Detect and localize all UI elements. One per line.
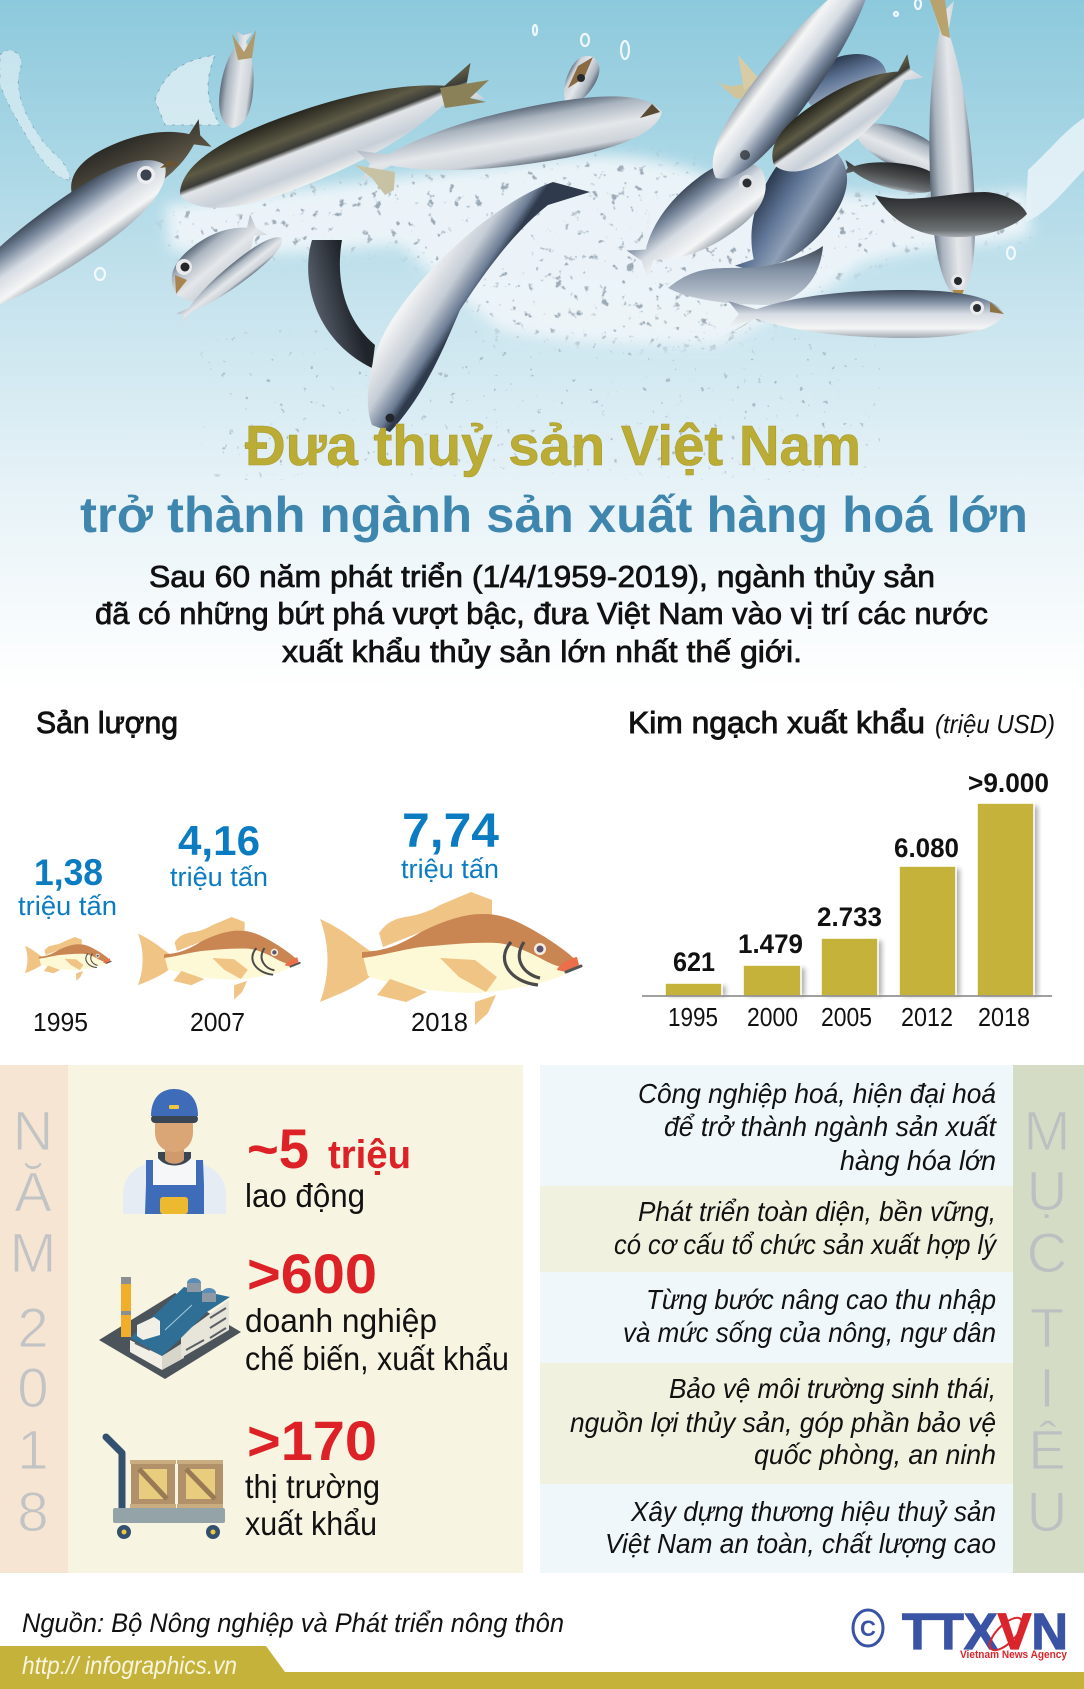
vertical label: MỤC TIÊU: M	[1024, 1099, 1070, 1162]
bar years: 2018	[978, 1002, 1030, 1032]
bar years: 2000	[747, 1002, 798, 1032]
droplets below the fish	[200, 330, 880, 480]
bar values: 621	[673, 947, 715, 977]
stat: workers	[245, 1117, 411, 1214]
value: 1,38	[34, 852, 103, 893]
bar shadows	[669, 806, 1038, 996]
vertical label: MỤC TIÊU: I	[1039, 1356, 1055, 1419]
stat: markets: >170	[247, 1409, 377, 1472]
goal 2	[614, 1196, 998, 1260]
goal 2: Phát triển toàn diện, bền vững,	[638, 1196, 996, 1227]
fish: centre upper	[354, 84, 667, 195]
goal 3: và mức sống của nông, ngư dân	[623, 1317, 996, 1348]
bar values: 2.733	[817, 902, 882, 932]
goal 4: quốc phòng, an ninh	[754, 1439, 996, 1470]
stat: enterprises: doanh nghiệp	[245, 1302, 437, 1339]
copyright mark	[853, 1610, 883, 1646]
fish: lower right	[722, 290, 1004, 338]
title line 2: trở thành ngành sản xuất hàng hoá lớn	[80, 487, 1028, 543]
icon: large fish	[320, 892, 581, 1025]
copyright mark: C	[860, 1616, 876, 1641]
fish: vertical right	[921, 0, 980, 300]
icon: factory	[99, 1277, 241, 1379]
goal 5: Việt Nam an toàn, chất lượng cao	[605, 1528, 996, 1559]
vertical label: MỤC TIÊU: C	[1027, 1221, 1067, 1284]
fish: top-left dark back	[167, 47, 490, 229]
water splash: left arc	[0, 50, 84, 181]
source line: Nguồn: Bộ Nông nghiệp và Phát triển nông thôn	[22, 1608, 564, 1638]
goal 5	[605, 1496, 996, 1559]
goal 3: Từng bước nâng cao thu nhập	[646, 1284, 996, 1315]
logo: TTXVN	[853, 1603, 1068, 1661]
vertical label: NĂM 2018: 0	[17, 1356, 49, 1419]
bar years: 2012	[901, 1002, 953, 1032]
stat: markets	[245, 1409, 380, 1542]
fish: top-right large	[694, 0, 907, 195]
bar values: 1.479	[738, 929, 803, 959]
fish: upright tail	[216, 30, 260, 130]
scattered drops	[95, 0, 1015, 280]
stat: workers: ~5	[247, 1117, 309, 1180]
stat: enterprises	[245, 1242, 509, 1377]
fish: upper left silver	[160, 205, 288, 326]
production figure 2018: triệu tấn	[401, 854, 499, 884]
fish: big left silver	[0, 139, 183, 358]
bars	[665, 803, 1034, 996]
water splash: upper left crown	[155, 55, 220, 125]
production figure 2007: triệu tấn	[170, 862, 268, 892]
fish: dark brown, behind	[60, 107, 217, 221]
footer url: http:// infographics.vn	[22, 1652, 237, 1680]
icon: small fish	[25, 937, 111, 981]
title line 1: Đưa thuỷ sản Việt Nam	[245, 414, 861, 478]
vertical label: NĂM 2018: 2	[17, 1296, 49, 1359]
goal 4: Bảo vệ môi trường sinh thái,	[669, 1373, 996, 1404]
background gradient	[0, 0, 1084, 690]
bar values: >9.000	[968, 768, 1049, 798]
fish: dark back, right	[759, 44, 931, 187]
bar chart: export turnover	[642, 768, 1052, 1032]
intro paragraph	[95, 559, 988, 669]
goal 4	[570, 1373, 996, 1470]
vertical label: MỤC TIÊU	[1013, 1065, 1084, 1573]
stat: markets: xuất khẩu	[245, 1505, 377, 1542]
stat: enterprises: chế biến, xuất khẩu	[245, 1340, 509, 1377]
footer bar	[0, 1646, 1084, 1689]
vertical label: MỤC TIÊU: Ê	[1028, 1418, 1066, 1481]
heading: export turnover: (triệu USD)	[935, 709, 1055, 739]
stat: enterprises: >600	[247, 1242, 377, 1305]
vertical label: NĂM 2018: Ă	[14, 1160, 52, 1223]
water splash: right arc	[1025, 118, 1084, 222]
fish: large blue	[720, 128, 864, 296]
fish: dark head, far right	[875, 192, 1027, 237]
vertical label: NĂM 2018: 1	[17, 1418, 49, 1481]
vertical label: MỤC TIÊU: U	[1027, 1480, 1067, 1543]
heading: production: Sản lượng	[36, 705, 178, 740]
panel: goals	[540, 1065, 1084, 1573]
vertical label: NĂM 2018: 8	[17, 1480, 49, 1543]
production figure 2018	[320, 805, 581, 1037]
fish: long central	[368, 182, 590, 432]
intro paragraph: xuất khẩu thủy sản lớn nhất thế giới.	[282, 634, 802, 669]
vertical label: MỤC TIÊU: T	[1030, 1296, 1064, 1359]
hero illustration: sardines leaping through splashing water	[0, 0, 1084, 480]
goal 4: nguồn lợi thủy sản, góp phần bảo vệ	[570, 1407, 996, 1438]
agency name: Vietnam News Agency	[960, 1649, 1068, 1661]
goal 1	[638, 1078, 997, 1176]
icon: medium fish	[138, 917, 300, 1000]
fish: mid silver	[618, 144, 781, 290]
year: 1995	[33, 1007, 88, 1037]
heading: export turnover	[628, 705, 1055, 740]
year: 2018	[411, 1007, 468, 1037]
icon: cargo trolley	[106, 1437, 225, 1539]
bar values: 6.080	[894, 833, 959, 863]
goal 5: Xây dựng thương hiệu thuỷ sản	[630, 1496, 996, 1527]
fish: dark crescent	[308, 240, 375, 368]
fish: back pair on the right	[838, 107, 948, 197]
production figure 2007	[138, 817, 300, 1037]
stat: workers: lao động	[245, 1177, 365, 1214]
vertical label: NĂM 2018: N	[13, 1099, 53, 1162]
panel: year 2018 statistics	[0, 1065, 523, 1573]
goal text	[570, 1078, 998, 1559]
goal 3	[623, 1284, 996, 1348]
bar years	[668, 1002, 1030, 1032]
bar years: 1995	[668, 1002, 718, 1032]
year: 2007	[190, 1007, 245, 1037]
goal 1: hàng hóa lớn	[840, 1145, 996, 1176]
value: 4,16	[178, 817, 260, 864]
stat: workers: triệu	[328, 1133, 411, 1177]
intro paragraph: Sau 60 năm phát triển (1/4/1959-2019), ngành thủy sản	[149, 559, 935, 594]
water splash: main body	[165, 155, 1030, 345]
goal 2: có cơ cấu tổ chức sản xuất hợp lý	[614, 1229, 998, 1260]
stat: markets: thị trường	[245, 1468, 380, 1505]
heading: export turnover: Kim ngạch xuất khẩu	[628, 705, 925, 740]
icon: worker	[123, 1089, 226, 1214]
title	[80, 414, 1028, 543]
fish: low centre	[668, 246, 823, 305]
intro paragraph: đã có những bứt phá vượt bậc, đưa Việt Nam vào vị trí các nước	[95, 596, 988, 631]
vertical label: MỤC TIÊU: Ụ	[1027, 1159, 1067, 1222]
wordmark: TTXVN	[902, 1603, 1068, 1660]
value: 7,74	[402, 805, 499, 858]
vertical label: NĂM 2018: M	[10, 1221, 56, 1284]
vertical label: NĂM 2018	[0, 1065, 68, 1573]
production figure 1995: triệu tấn	[18, 891, 117, 921]
goal 1: Công nghiệp hoá, hiện đại hoá	[638, 1078, 996, 1109]
goal 1: để trở thành ngành sản xuất	[664, 1111, 997, 1142]
fish: grey-blue round body	[797, 43, 895, 125]
fish: small head at top	[553, 50, 606, 116]
bar years: 2005	[821, 1002, 872, 1032]
production figure 1995	[18, 852, 117, 1037]
bar values	[673, 768, 1049, 977]
